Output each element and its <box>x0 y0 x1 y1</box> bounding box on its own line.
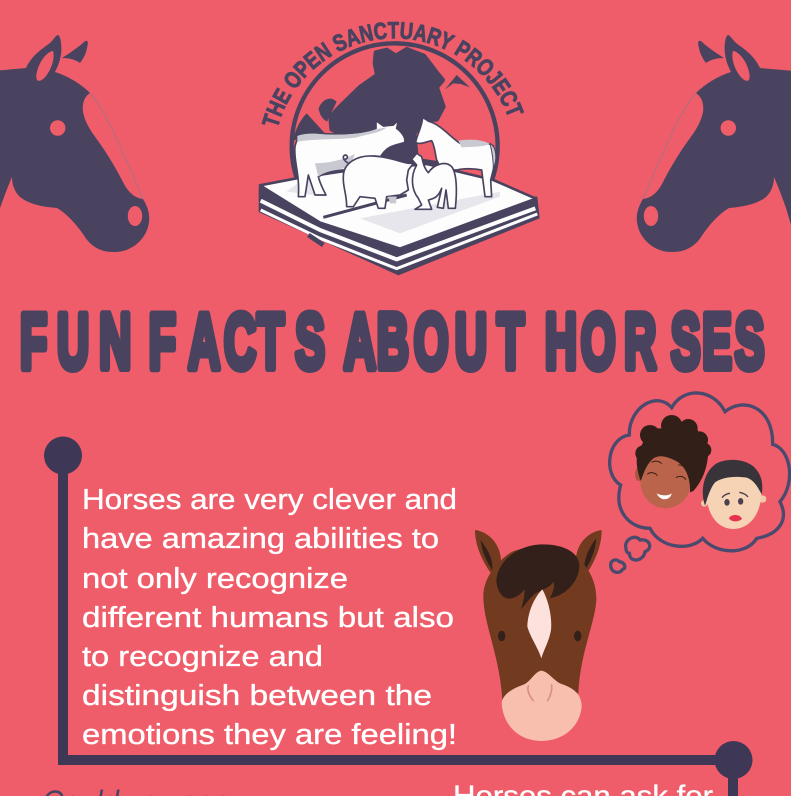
icon: left horse head silhouette <box>0 35 149 252</box>
fact text: clever horses: different humans but also <box>82 602 454 634</box>
globe with continents <box>292 43 498 249</box>
man worried <box>701 460 766 529</box>
timeline connector <box>44 436 752 796</box>
cow <box>295 120 405 197</box>
logo: The Open Sanctuary Project <box>258 22 540 276</box>
icon: brown horse face <box>475 530 602 741</box>
open book <box>259 164 540 275</box>
logo text arc: THE OPEN SANCTUARY PROJECT <box>261 22 524 125</box>
title: FUN FACTS ABOUT HORSES <box>20 299 764 385</box>
fact text: clever horses <box>82 484 457 751</box>
fact text: clever horses: distinguish between the <box>82 680 432 712</box>
ears <box>475 530 602 577</box>
blaze <box>527 589 551 658</box>
cloud outline <box>610 393 790 572</box>
thought bubble with faces <box>610 393 790 572</box>
horse <box>416 117 496 197</box>
forelock <box>496 544 579 609</box>
fact text: clever horses: emotions they are feeling! <box>82 719 457 751</box>
fact text: clever horses: not only recognize <box>82 563 348 595</box>
pig <box>343 155 413 208</box>
fact text: clever horses: have amazing abilities to <box>82 523 439 555</box>
rooster <box>412 153 456 209</box>
icon: right horse head silhouette <box>637 35 791 252</box>
woman smiling <box>635 415 711 508</box>
head <box>483 547 596 700</box>
eyes <box>498 631 581 641</box>
muzzle <box>502 671 582 741</box>
fact text: clever horses: to recognize and <box>82 641 323 673</box>
fact text: clever horses: Horses are very clever and <box>82 484 457 516</box>
